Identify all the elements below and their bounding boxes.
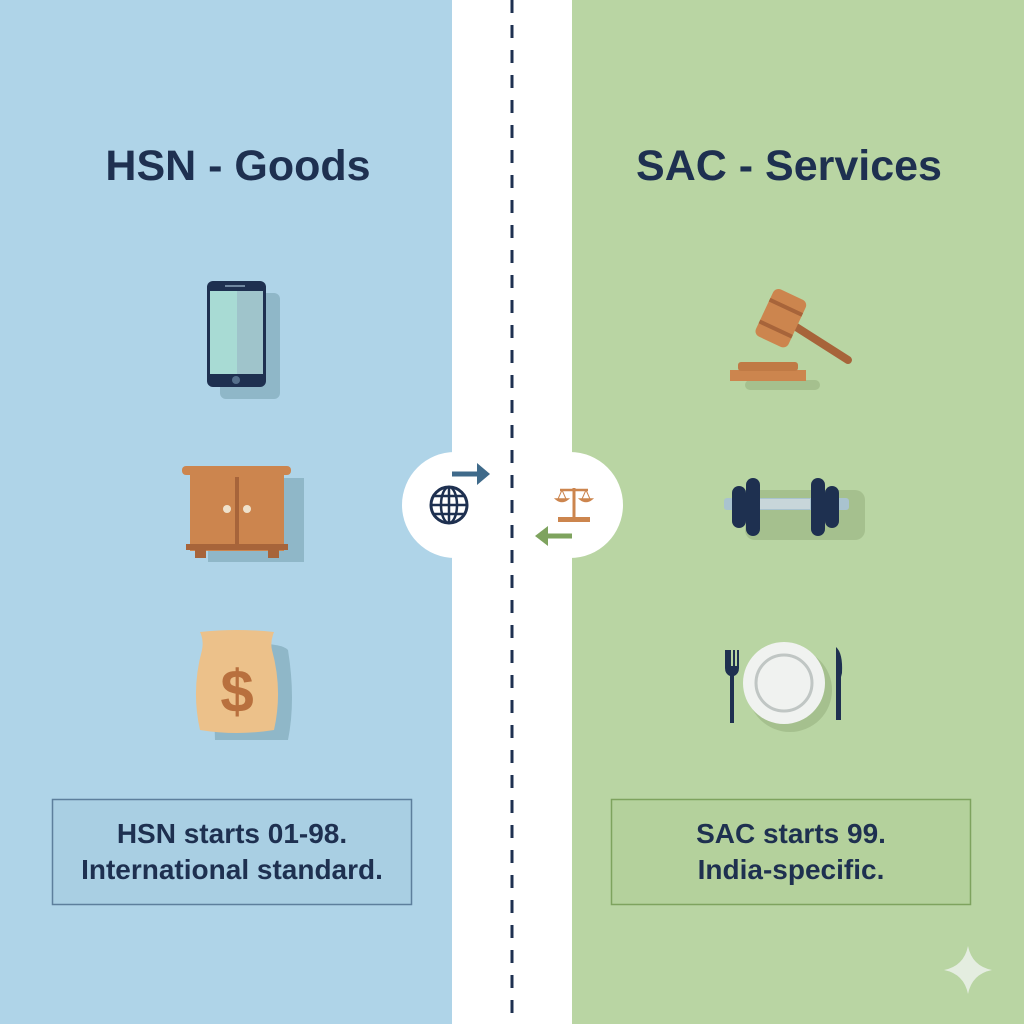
- text box: SAC note: [612, 800, 970, 904]
- heading: SAC - Services: SAC - Services: [636, 142, 942, 190]
- icon: cabinet: [182, 466, 304, 562]
- icon: scales with arrow: [535, 488, 592, 546]
- panel: goods background: [0, 0, 452, 1024]
- icon: phone: [207, 281, 280, 399]
- panel: services background: [572, 0, 1024, 1024]
- heading: HSN - Goods: HSN - Goods: [105, 142, 371, 190]
- text box: SAC note: SAC starts 99.: [696, 818, 886, 849]
- icon: plate and cutlery: [725, 642, 842, 732]
- center badge: [402, 452, 623, 558]
- text box: HSN note: International standard.: [81, 854, 383, 885]
- icon: money bag: [196, 630, 292, 740]
- text box: HSN note: HSN starts 01-98.: [117, 818, 347, 849]
- text box: HSN note: [52, 800, 412, 904]
- icon: dumbbell: [724, 478, 865, 540]
- text box: SAC note: India-specific.: [698, 854, 884, 885]
- icon: money bag: $: [220, 658, 254, 725]
- icon: gavel: [730, 287, 848, 390]
- icon: globe with arrow: [431, 463, 490, 523]
- icon: sparkle: [944, 946, 992, 994]
